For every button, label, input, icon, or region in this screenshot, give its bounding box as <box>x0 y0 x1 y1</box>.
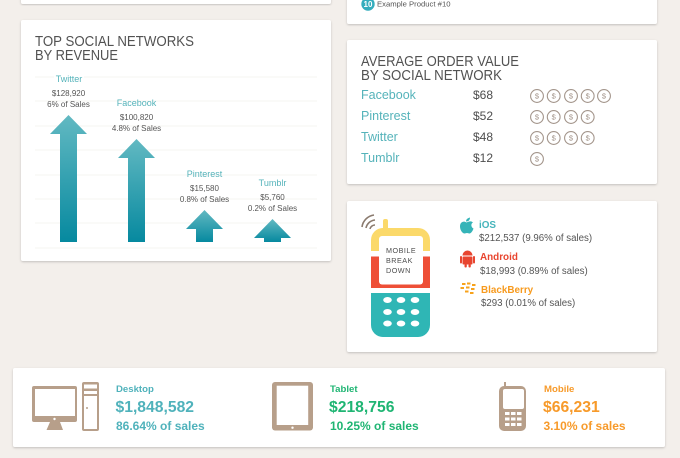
row: Twitter: $ <box>552 134 557 143</box>
heading: average order value <box>361 54 519 84</box>
text: BlackBerry: $293 (0.01% of sales) <box>481 298 575 309</box>
row: Pinterest: $ <box>552 113 557 122</box>
panel: mobile breakdown <box>347 201 657 352</box>
row: Tumblr: Tumblr <box>361 151 399 165</box>
row: Twitter: Twitter <box>361 130 398 144</box>
icon: android <box>460 251 475 268</box>
text: iOS <box>479 220 592 244</box>
heading: top social networks <box>35 34 194 64</box>
text: mobile <box>543 384 626 433</box>
row: Facebook: $ <box>586 92 591 101</box>
arrow: Pinterest <box>180 169 229 242</box>
text: tablet: $218,756 <box>329 399 395 416</box>
arrow: Tumblr: 0.2% of Sales <box>248 204 297 213</box>
arrow: Pinterest: 0.8% of Sales <box>180 195 229 204</box>
text: Android <box>480 252 588 277</box>
arrow: Facebook <box>112 98 161 242</box>
icon: phone illustration: BREAK <box>386 256 413 265</box>
text: desktop: Desktop <box>116 384 154 395</box>
row: Tumblr: $12 <box>473 151 493 165</box>
arrow: Facebook: 4.8% of Sales <box>112 124 161 133</box>
row: Pinterest: $ <box>535 113 540 122</box>
arrow: Twitter <box>47 74 90 242</box>
icon: desktop <box>32 382 99 431</box>
icon: blackberry <box>460 282 476 294</box>
icon: signal waves <box>362 215 375 229</box>
icon: phone illustration: MOBILE <box>386 246 416 255</box>
text: Android: Android <box>480 252 518 263</box>
arrow: Facebook: $100,820 <box>120 113 154 122</box>
row: Facebook: Facebook <box>361 88 417 102</box>
arrow: Twitter: 6% of Sales <box>47 100 90 109</box>
text: mobile: Mobile <box>544 384 574 395</box>
row: Facebook <box>361 88 610 102</box>
text: mobile: 3.10% of sales <box>544 419 626 433</box>
text: desktop: $1,848,582 <box>116 399 194 416</box>
icon: apple <box>460 218 474 234</box>
row: Facebook: $ <box>602 92 607 101</box>
arrow: Tumblr: $5,760 <box>260 193 285 202</box>
panel: cropped top products: 10 <box>364 0 373 9</box>
heading: average order value: AVERAGE ORDER VALUE <box>361 54 519 70</box>
panel: device totals <box>13 368 665 447</box>
row: Twitter <box>361 130 594 144</box>
text: desktop: 86.64% of sales <box>116 419 205 433</box>
heading: average order value: BY SOCIAL NETWORK <box>361 68 502 84</box>
icon: phone illustration <box>371 219 430 337</box>
text: mobile: $66,231 <box>543 399 600 416</box>
heading: top social networks: BY REVENUE <box>35 48 118 64</box>
text: tablet: 10.25% of sales <box>330 419 419 433</box>
row: Facebook: $ <box>535 92 540 101</box>
arrow: Twitter: Twitter <box>56 74 82 84</box>
text: iOS: $212,537 (9.96% of sales) <box>479 233 592 244</box>
text: iOS: iOS <box>479 220 496 231</box>
arrow: Tumblr <box>248 178 297 242</box>
row: Facebook: $68 <box>473 88 493 102</box>
icon: mobile <box>499 382 526 431</box>
row: Pinterest: $52 <box>473 109 493 123</box>
arrow: Facebook: Facebook <box>117 98 157 108</box>
text: BlackBerry <box>481 285 575 309</box>
text: BlackBerry: BlackBerry <box>481 285 534 296</box>
row: Facebook: $ <box>569 92 574 101</box>
row: Facebook: $ <box>552 92 557 101</box>
row: Twitter: $48 <box>473 130 493 144</box>
text: tablet: Tablet <box>330 384 358 395</box>
row: Tumblr <box>361 151 543 165</box>
heading: top social networks: TOP SOCIAL NETWORKS <box>35 34 194 50</box>
arrow: Twitter: $128,920 <box>52 89 86 98</box>
row: Twitter: $ <box>569 134 574 143</box>
panel: top social networks by revenue <box>21 20 331 261</box>
panel: cropped top left <box>21 0 331 4</box>
row: Pinterest <box>361 109 594 123</box>
row: Pinterest: $ <box>569 113 574 122</box>
panel: average order value <box>347 40 657 184</box>
text: desktop <box>116 384 205 433</box>
arrow: Tumblr: Tumblr <box>259 178 286 188</box>
icon: phone illustration: DOWN <box>386 266 411 275</box>
arrow: Pinterest: Pinterest <box>187 169 223 179</box>
row: Twitter: $ <box>535 134 540 143</box>
row: Tumblr: $ <box>535 155 540 164</box>
text: Android: $18,993 (0.89% of sales) <box>480 266 588 277</box>
row: Twitter: $ <box>586 134 591 143</box>
arrow: Pinterest: $15,580 <box>190 184 220 193</box>
row: Pinterest: $ <box>586 113 591 122</box>
panel: cropped top products <box>347 0 657 24</box>
icon: tablet <box>272 382 313 430</box>
text: tablet <box>329 384 419 433</box>
row: Pinterest: Pinterest <box>361 109 411 123</box>
